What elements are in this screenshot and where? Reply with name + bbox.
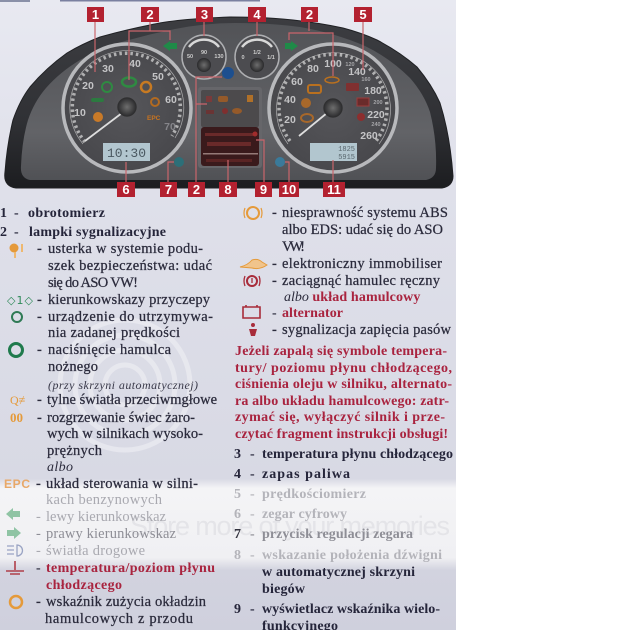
right column legend: [234, 205, 453, 630]
item: ABS: niesprawność systemu ABS: [282, 205, 448, 221]
item 3: coolant temperature: temperatura płynu chłodzącego: [262, 447, 453, 462]
warning paragraph: Jeżeli zapalą się symbole tempera-: [235, 344, 447, 359]
icon: handbrake: [244, 276, 260, 286]
gauge: coolant temperature: 90: [201, 50, 207, 56]
gauge: tachometer: 70: [164, 121, 176, 133]
warning paragraph: tury/ poziomu płynu chłodzącego,: [235, 361, 452, 376]
item 8: gear indicator: 8: [234, 548, 241, 563]
item: airbag fault: -: [37, 241, 42, 257]
item: handbrake: -: [272, 273, 277, 289]
item 5: speedometer: -: [250, 487, 255, 502]
item: trailer indicators: kierunkowskazy przyczepy: [48, 292, 211, 308]
item: alternator: -: [272, 306, 277, 321]
item 9: multifunction display: wyświetlacz wskaźnika wielo-: [262, 602, 440, 617]
gauge: speedometer: 240: [371, 122, 381, 128]
item: brake system: układ hamulcowy: [312, 290, 420, 305]
item 4: fuel: zapas paliwa: [262, 467, 350, 482]
item 8 continued: w automatycznej skrzyni: [262, 565, 415, 580]
gauge: tachometer: 20: [82, 80, 94, 92]
item: glow plugs: wych w silnikach wysoko-: [47, 426, 203, 442]
item: high beam: światła drogowe: [46, 543, 145, 559]
item 5: speedometer: 5: [234, 487, 241, 502]
gauge: speedometer: 160: [361, 77, 371, 83]
callout numbers: bottom row: [117, 182, 345, 197]
gauge: tachometer: 40: [129, 58, 141, 70]
icon: airbag: [10, 244, 22, 258]
icon: left arrow: [6, 508, 20, 520]
icon: glow plugs: 00: [10, 410, 23, 425]
item: trailer indicators: -: [37, 292, 42, 308]
gauge: tachometer: 50: [152, 71, 164, 83]
high beam lamp: [222, 67, 234, 79]
item 2: warning lamps: lampki sygnalizacyjne: [29, 225, 166, 240]
item: ABS: albo EDS: udać się do ASO: [282, 222, 443, 238]
gauge: speedometer: 40: [284, 94, 296, 106]
instrument cluster: [5, 7, 453, 197]
warning paragraph: ra albo układu hamulcowego: zatr-: [235, 394, 449, 409]
gauge: speedometer: 200: [373, 100, 383, 106]
gauge: fuel: 1/1: [267, 55, 275, 61]
cluster face: [21, 23, 436, 180]
item: high beam: -: [36, 543, 41, 559]
note: automatic gearbox: (przy skrzyni automatycznej): [48, 378, 198, 392]
odometer display: 5915: [338, 154, 355, 162]
item 3: coolant temperature: 3: [234, 447, 241, 462]
warning paragraph: ciśnienia oleju w silniku, alternato-: [235, 377, 452, 392]
warning lamps: tachometer: EPC: [147, 115, 161, 122]
watermark text: Store more of your memories: [130, 511, 450, 541]
gauge: speedometer: 80: [307, 63, 319, 75]
icon: battery: [243, 305, 260, 318]
icon: cruise control: [12, 312, 22, 322]
icon: trailer indicators: ◇1◇: [7, 294, 34, 307]
item 3: coolant temperature: -: [250, 447, 255, 462]
item: coolant: -: [36, 561, 41, 576]
gauge: speedometer: 60: [291, 76, 303, 88]
text: albo: albo: [47, 460, 73, 475]
item: handbrake: zaciągnąć hamulec ręczny: [282, 273, 441, 289]
item: glow plugs: rozgrzewanie świec żaro-: [47, 410, 195, 426]
gauge: speedometer: [269, 44, 397, 172]
item 6: digital clock: -: [250, 507, 255, 522]
item 6: digital clock: zegar cyfrowy: [262, 507, 347, 522]
item: left indicator: -: [36, 509, 41, 525]
gauge: coolant temperature: [182, 35, 226, 79]
gauge: speedometer: 180: [364, 85, 382, 97]
gauge: tachometer: [63, 44, 191, 172]
item: immobiliser: -: [272, 256, 277, 272]
icon: immobiliser car: [240, 259, 267, 269]
item: airbag fault: się do ASO VW!: [48, 275, 138, 291]
item: cruise control: nia zadanej prędkości: [48, 325, 180, 341]
gauge: speedometer: 140: [348, 66, 366, 78]
icon: coolant: [6, 561, 24, 574]
callout numbers: top row: 4: [253, 7, 261, 22]
warning paragraph: czytać fragment instrukcji obsługi!: [235, 427, 448, 442]
item: EPC: -: [36, 476, 41, 492]
item 2: warning lamps: 2: [0, 225, 7, 240]
icon: brake pedal: [10, 344, 22, 356]
item: seat belt: -: [272, 322, 277, 338]
item: brake pads: hamulcowych z przodu: [45, 611, 193, 627]
odometer display: 1825: [338, 146, 355, 154]
gauge: speedometer: 100: [324, 58, 342, 70]
item 4: fuel: 4: [234, 467, 241, 482]
item: coolant: chłodzącego: [46, 578, 122, 593]
item: immobiliser: elektroniczny immobiliser: [282, 256, 442, 272]
gauge: fuel: 1/2: [253, 50, 261, 56]
item: airbag fault: usterka w systemie podu-: [48, 241, 203, 257]
item: right indicator: -: [36, 526, 41, 542]
icon: high beam: [7, 545, 22, 556]
top cropped text strip: [0, 0, 260, 2]
item 7: clock adjust: 7: [234, 527, 241, 542]
gauge: tachometer: 10: [74, 107, 86, 119]
multifunction display: [201, 127, 259, 166]
item 8 continued: biegów: [262, 582, 306, 597]
item: brake pedal: nożnego: [48, 359, 98, 375]
callout numbers: bottom row: 2: [193, 182, 200, 197]
warning paragraph: zymać się, wyłączyć silnik i prze-: [235, 410, 445, 425]
gauge: fuel: 0: [241, 55, 245, 61]
item 1: tachometer: 1: [0, 206, 7, 221]
icon: ABS: [244, 207, 262, 219]
callout numbers: bottom row: 6: [122, 182, 130, 197]
item 7: clock adjust: przycisk regulacji zegara: [262, 527, 413, 542]
callout numbers: top row: 1: [92, 7, 99, 22]
gauge: speedometer: 220: [367, 109, 385, 121]
item 9: multifunction display: -: [250, 602, 255, 617]
item 6: digital clock: 6: [234, 507, 241, 522]
item 8: gear indicator: -: [250, 548, 255, 563]
warning lamps: speedometer: [301, 77, 369, 122]
gauge: speedometer: 120: [345, 62, 355, 68]
arrow lamp: left turn: [163, 41, 177, 51]
icon: seat belt: [249, 323, 257, 336]
callout numbers: top row: 2: [306, 7, 313, 22]
item 1: tachometer: -: [14, 206, 19, 221]
item: ABS: VW!: [282, 239, 305, 255]
item: glow plugs: prężnych: [47, 443, 103, 459]
callout numbers: top row: 3: [201, 7, 208, 22]
item: left indicator: lewy kierunkowskaz: [46, 509, 167, 525]
item 1: tachometer: obrotomierz: [28, 206, 105, 221]
centre warning panel: [198, 87, 262, 168]
item: glow plugs: -: [37, 410, 42, 426]
gauge: tachometer: 30: [102, 63, 114, 75]
gauge: tachometer: 60: [165, 94, 177, 106]
cluster housing: [5, 17, 453, 188]
item: alternator: alternator: [282, 306, 343, 321]
gauge: speedometer: 20: [284, 114, 296, 126]
gauge: coolant temperature: 50: [187, 54, 193, 60]
callout numbers: top row: 5: [359, 7, 367, 22]
item: right indicator: prawy kierunkowskaz: [46, 526, 177, 542]
item 4: fuel: -: [250, 467, 255, 482]
callout numbers: bottom row: 7: [165, 182, 172, 197]
icon: rear fog light: Q≢: [10, 393, 31, 407]
left column legend: [0, 206, 217, 627]
callout numbers: bottom row: 8: [224, 182, 232, 197]
item 7: clock adjust: -: [250, 527, 255, 542]
callout numbers: bottom row: 10: [282, 182, 296, 197]
item 2: warning lamps: -: [14, 225, 19, 240]
item: brake system: albo: [284, 290, 312, 305]
item: EPC: układ sterowania w silni-: [46, 476, 198, 492]
digital clock display: 10:30: [107, 146, 146, 161]
callout numbers: top row: 2: [146, 7, 154, 22]
button: clock adjust: [174, 157, 184, 167]
item: rear fog light: -: [37, 392, 42, 408]
icon: brake pads: [10, 596, 22, 608]
item: EPC continued: kach benzynowych: [46, 492, 163, 508]
item: brake pedal: -: [37, 342, 42, 358]
item: brake pads: wskaźnik zużycia okładzin: [46, 594, 207, 610]
item: brake pedal: naciśnięcie hamulca: [48, 342, 172, 358]
gauge: speedometer: 260: [360, 130, 378, 142]
icon: EPC: EPC: [4, 477, 30, 491]
odometer display: [310, 143, 357, 162]
item: cruise control: -: [37, 309, 42, 325]
item: ABS: -: [272, 205, 277, 221]
gauge: coolant temperature: 130: [214, 54, 224, 60]
item: coolant: temperatura/poziom płynu: [46, 561, 215, 576]
item 9: multifunction display: 9: [234, 602, 241, 617]
callout numbers: bottom row: 11: [327, 182, 341, 197]
item: brake pads: -: [36, 594, 41, 610]
item 8: gear indicator: wskazanie położenia dźwigni: [262, 548, 442, 563]
watermark rings: [60, 320, 190, 450]
arrow lamp: right turn: [285, 41, 298, 51]
item 5: speedometer: prędkościomierz: [262, 487, 366, 502]
item: seat belt: sygnalizacja zapięcia pasów: [282, 322, 452, 338]
item: rear fog light: tylne światła przeciwmgłowe: [47, 392, 217, 408]
callout numbers: top row: [87, 7, 372, 22]
callout numbers: bottom row: 9: [260, 182, 267, 197]
item: cruise control: urządzenie do utrzymywa-: [48, 309, 213, 325]
leader lines: [95, 20, 363, 182]
icon: right arrow: [7, 527, 21, 539]
item: airbag fault: szek bezpieczeństwa: udać: [48, 258, 212, 274]
button: trip reset: [275, 157, 285, 167]
gauge: fuel: [235, 35, 279, 79]
